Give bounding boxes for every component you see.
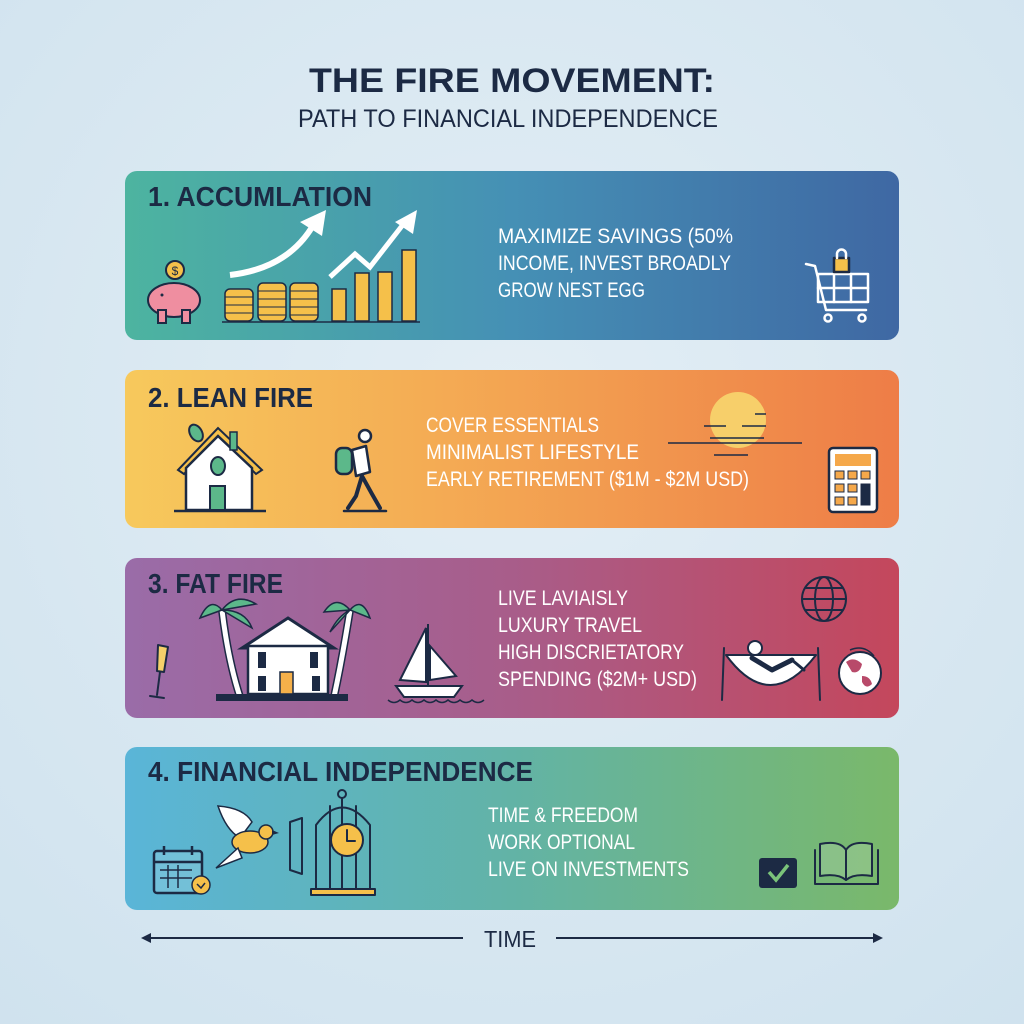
arrow: time axis <box>141 926 883 952</box>
panel: lean fire: EARLY RETIREMENT ($1M - $2M USD) <box>426 468 749 491</box>
icon: piggy bank: $ <box>172 264 179 278</box>
heading: accumulation: 1. ACCUMLATION <box>148 181 372 212</box>
icon: growth arrows and bars <box>230 210 417 321</box>
icon: hammock person <box>722 641 820 700</box>
panel: financial independence: WORK OPTIONAL <box>488 831 635 854</box>
title: THE FIRE MOVEMENT: <box>309 62 715 100</box>
panel: lean fire <box>125 370 899 528</box>
panel: fat fire <box>125 558 899 718</box>
icon: calendar <box>154 846 210 894</box>
icon: piggy bank <box>148 261 200 323</box>
icon: walking backpacker <box>336 430 386 511</box>
icon: coin stacks <box>222 283 420 322</box>
panel: fat fire: HIGH DISCRIETATORY <box>498 641 684 664</box>
icon: open book <box>815 843 878 884</box>
icon: house <box>174 422 266 511</box>
heading: financial independence: 4. FINANCIAL INDEPENDENCE <box>148 756 533 787</box>
icon: beach house with palms <box>200 599 370 701</box>
body text: lean fire: COVER ESSENTIALS <box>426 414 599 437</box>
panel: accumulation: GROW NEST EGG <box>498 279 645 302</box>
body text: financial independence: TIME & FREEDOM <box>488 804 638 827</box>
panel: financial independence <box>125 747 899 910</box>
icon: calculator <box>829 448 877 512</box>
panel: fat fire: LUXURY TRAVEL <box>498 614 642 637</box>
icon: bird <box>216 806 279 868</box>
icon: shopping cart <box>806 250 868 322</box>
icon: globe <box>802 577 846 621</box>
icon: birdcage with clock <box>290 790 375 895</box>
body text: accumulation: MAXIMIZE SAVINGS (50% <box>498 225 733 248</box>
panel: accumulation: INCOME, INVEST BROADLY <box>498 252 731 275</box>
panel: fat fire: SPENDING ($2M+ USD) <box>498 668 697 691</box>
panel: accumulation <box>125 171 899 340</box>
heading: fat fire: 3. FAT FIRE <box>148 568 283 599</box>
panel: financial independence: LIVE ON INVESTMENTS <box>488 858 689 881</box>
icon: champagne glass <box>150 645 168 698</box>
icon: world globe <box>839 648 881 694</box>
icon: sailboat <box>388 624 484 702</box>
arrow: time axis: TIME <box>484 926 536 952</box>
title <box>298 62 718 133</box>
icon: checkbox <box>759 858 797 888</box>
title: PATH TO FINANCIAL INDEPENDENCE <box>298 105 718 133</box>
body text: fat fire: LIVE LAVIAISLY <box>498 587 628 610</box>
panel: lean fire: MINIMALIST LIFESTYLE <box>426 441 639 464</box>
icon: sunset <box>668 392 802 455</box>
heading: lean fire: 2. LEAN FIRE <box>148 382 313 413</box>
